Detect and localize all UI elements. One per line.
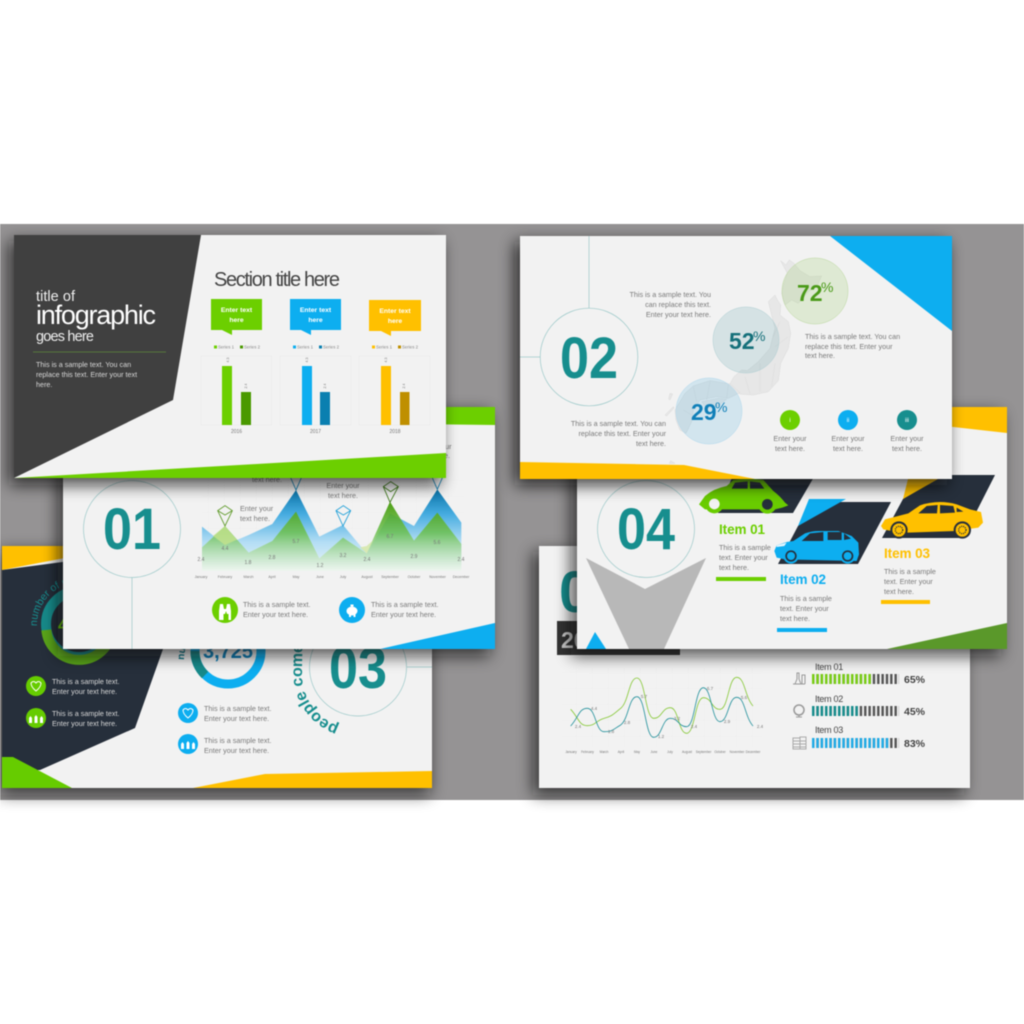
chart data labels: 2.8: [269, 555, 276, 561]
panel: slide 04 cars: [577, 407, 1007, 649]
yellow bottom band: [193, 771, 432, 788]
dark panel text 2: Enter your text here.: [52, 719, 117, 728]
section circle 04: 04: [617, 497, 675, 562]
progress row: Item 02 45%: Item 02: [815, 694, 843, 704]
slide 01 shadow: [58, 412, 490, 656]
text: piggy bank item: This is a sample text.: [371, 600, 439, 609]
line chart data labels: 2.9: [724, 719, 731, 724]
item 01 block: This is a sample: [719, 543, 771, 552]
intro text: replace this text. Enter your text: [36, 370, 137, 379]
progress row: Item 03 83%: 83%: [904, 738, 926, 750]
line chart month axis: June: [651, 750, 658, 754]
chart callout texts: Enter your: [250, 465, 284, 474]
line chart data labels: 1.8: [608, 729, 615, 734]
intro text: This is a sample text. You can: [36, 360, 131, 369]
main title: title of: [36, 289, 76, 305]
dark panel text 1: Enter your text here.: [52, 687, 117, 696]
chart data labels: 5.6: [434, 540, 441, 546]
item 02 block: text. Enter your: [780, 604, 829, 613]
line chart data labels: 2.4: [757, 724, 764, 729]
bar chart 2017: 2.4: [323, 384, 327, 388]
line chart month axis: October: [714, 750, 727, 754]
yellow top band: [900, 407, 1007, 433]
grey chevron arrow: [586, 558, 706, 649]
chart data labels: 2.4: [364, 557, 371, 563]
progress row: Item 01 65%: [793, 662, 926, 686]
line chart data labels: 6.7: [707, 686, 714, 691]
bar chart 2018: Series 1: [376, 344, 393, 350]
callout: green: [211, 299, 262, 335]
text block 1: This is a sample text.: [204, 704, 272, 713]
chart data labels: 5.7: [293, 539, 300, 545]
item 03 block: Item 03: [884, 546, 930, 561]
blue icon: people: [178, 734, 198, 754]
slide 03 shadow: [0, 551, 430, 795]
dark navy side panel: [2, 561, 165, 770]
bar chart 2018: 2018: [389, 429, 401, 435]
icon item i: text here.: [775, 444, 805, 453]
chart data labels: 1.8: [245, 560, 252, 566]
bubble 52%: 52: [729, 328, 755, 354]
slide 02 shadow: [515, 242, 947, 485]
infographic: five overlapping template slides: [0, 223, 1024, 808]
yellow bottom band: [520, 462, 755, 479]
line chart month axis: May: [634, 750, 640, 754]
bar chart 2018: 2.4: [402, 384, 406, 388]
dark year box: [557, 621, 680, 655]
item 03 block: text here.: [884, 587, 914, 596]
bar chart 2017: 4.3: [305, 358, 309, 362]
item 02 block: This is a sample: [780, 594, 832, 603]
icon item ii: text here.: [833, 444, 863, 453]
line chart: [565, 676, 764, 754]
item 01 block: [716, 522, 771, 581]
line chart data labels: 1.2: [658, 734, 665, 739]
item 01 block: Item 01: [719, 522, 765, 537]
text block right: This is a sample text. You can: [805, 332, 900, 341]
chart data labels: 2.4: [198, 557, 205, 563]
line chart month axis: July: [667, 750, 673, 754]
donut chart: members: 4,210: [58, 615, 106, 636]
accent triangles: [798, 479, 938, 526]
progress row: Item 03 83%: [793, 725, 926, 750]
progress row: Item 03 83%: Item 03: [815, 725, 843, 735]
bar chart 2017: [280, 344, 351, 435]
text block top: can replace this text.: [645, 300, 711, 309]
green icon: hearts: [26, 676, 46, 696]
line chart month axis: August: [682, 750, 692, 754]
bar chart 2017: Series 1: [297, 344, 314, 350]
line chart data labels: 4.4: [591, 706, 598, 711]
panel: slide 03 people count: [1, 545, 433, 789]
line chart data labels: 5.7: [641, 694, 648, 699]
icon item ii: Enter your: [831, 434, 865, 443]
chart callout texts: Enter your: [240, 504, 274, 513]
progress row: Item 01 65%: Item 01: [815, 662, 843, 672]
bar chart 2017: Series 2: [323, 344, 340, 350]
section circle 01: [84, 480, 180, 649]
chart data labels: 2.4: [458, 557, 465, 563]
green corner triangle: [2, 757, 72, 788]
bubble 52%: [713, 307, 779, 373]
callout: yellow: [369, 300, 421, 336]
line chart month axis: September: [696, 750, 712, 754]
main title: [36, 289, 156, 345]
bubble 72%: %: [821, 279, 833, 295]
section circle 02: 02: [560, 326, 618, 391]
bubble 29%: [676, 378, 742, 444]
section circle 02: [520, 236, 638, 406]
progress row: Item 02 45%: [794, 694, 926, 718]
line chart data labels: 2.4: [691, 724, 698, 729]
green bottom band: [14, 453, 446, 478]
car panels: [718, 470, 995, 564]
line chart month axis: April: [618, 750, 624, 754]
callout: green: Enter text: [221, 307, 253, 314]
line chart data labels: 2.4: [575, 724, 582, 729]
text block top: Enter your text here.: [646, 310, 711, 319]
bubble 29%: %: [715, 399, 727, 415]
item 03 block: [881, 546, 936, 604]
blue top-right triangle: [830, 236, 952, 331]
blue bottom-right wedge: [380, 623, 495, 649]
chart month axis: October: [408, 575, 421, 579]
bar chart 2016: Series 1: [218, 344, 235, 350]
text block 2: Enter your text here.: [204, 746, 269, 755]
line chart month axis: November: [730, 750, 745, 754]
donut chart: 3,725: 3,725: [203, 641, 253, 663]
icon item iii: text here.: [892, 444, 922, 453]
panel: slide 02 Japan map: [520, 236, 952, 479]
text block 2: This is a sample text.: [204, 736, 272, 745]
chart data labels: 3.2: [340, 553, 347, 559]
dark panel text 1: This is a sample text.: [52, 677, 120, 686]
text block top: This is a sample text. You: [629, 290, 711, 299]
text block left: This is a sample text. You can: [571, 419, 666, 428]
donut chart: 3,725: [190, 648, 266, 690]
icon item iii: Enter your: [890, 434, 924, 443]
chart month axis: December: [453, 575, 470, 579]
chart callout texts: text here.: [420, 451, 450, 460]
chart data labels: 1.2: [317, 563, 324, 569]
area chart: [201, 489, 462, 570]
callout: yellow: here: [388, 318, 402, 325]
line chart month axis: February: [581, 750, 594, 754]
icon: handshake: [212, 597, 238, 623]
chart month axis: May: [293, 575, 300, 579]
callout: yellow: Enter text: [379, 308, 411, 315]
chart month axis: June: [316, 575, 324, 579]
bar chart 2016: 2.4: [244, 384, 248, 388]
dark grey title shape: [14, 235, 201, 478]
bubble 52%: %: [753, 328, 765, 344]
item 02 block: Item 02: [780, 572, 826, 587]
item 01 block: text here.: [719, 563, 749, 572]
chart month axis: [195, 575, 470, 579]
section title: Section title here: [214, 269, 340, 291]
intro text: here.: [36, 380, 52, 389]
chart markers: [218, 474, 444, 526]
icon item iii: iii: [905, 418, 909, 424]
chart callout texts: text here.: [252, 475, 282, 484]
line chart data labels: 2.8: [624, 720, 631, 725]
chart data labels: 4.4: [222, 546, 229, 552]
section circle 03: [308, 648, 432, 717]
line chart month axis: December: [746, 750, 761, 754]
bubble 72%: [782, 258, 848, 324]
bar chart 2018: 4.3: [384, 358, 388, 362]
icon: piggy bank: [339, 597, 365, 623]
text block left: text here.: [636, 439, 666, 448]
callout: blue: here: [308, 317, 323, 324]
text block left: replace this text. Enter your: [578, 429, 667, 438]
chart month axis: July: [340, 575, 346, 579]
chart data labels: 6.7: [387, 534, 394, 540]
dark panel text 2: This is a sample text.: [52, 709, 120, 718]
bar chart 2016: [201, 344, 272, 435]
chart month axis: April: [268, 575, 276, 579]
bubble 72%: 72: [797, 280, 823, 306]
item 01 block: text. Enter your: [719, 553, 768, 562]
chart callout texts: [240, 442, 452, 523]
chart month axis: November: [429, 575, 447, 579]
text: piggy bank item: Enter your text here.: [371, 610, 436, 619]
callout: blue: Enter text: [300, 307, 332, 314]
curved label: number: number of: [178, 648, 186, 660]
chart month axis: February: [218, 575, 232, 579]
line chart month axis: January: [565, 750, 577, 754]
bar chart 2018: Series 2: [402, 344, 419, 350]
chart callout texts: text here.: [240, 514, 270, 523]
chart month axis: August: [361, 575, 373, 579]
curved label: number of members: number of members: [30, 580, 64, 626]
donut chart: members: [46, 591, 112, 660]
chart month axis: March: [244, 575, 254, 579]
bar chart 2016: Series 2: [244, 344, 261, 350]
section circle 01: 01: [103, 497, 161, 562]
main title: infographic: [36, 300, 156, 330]
line chart data labels: 5.6: [741, 695, 748, 700]
slide title shadow: [9, 241, 441, 485]
panel: slide 01 area chart: [63, 407, 495, 649]
callout: green: here: [229, 317, 244, 324]
panel: slide 05 line chart and progress: [539, 546, 970, 788]
text: handshake item: This is a sample text.: [243, 600, 311, 609]
car: yellow sedan: [881, 502, 983, 539]
map of Japan: [665, 260, 822, 463]
line chart month axis: [565, 750, 761, 754]
yellow top band: [2, 546, 70, 570]
icon item i: Enter your: [773, 434, 807, 443]
text block right: replace this text. Enter your: [805, 342, 893, 351]
chart data labels: 2.9: [411, 554, 418, 560]
item 02 block: text here.: [780, 614, 810, 623]
grey backdrop band: [0, 224, 1024, 800]
section circle 04: [598, 480, 694, 578]
chart callout texts: text here.: [328, 491, 358, 500]
chart callout texts: Enter your: [326, 481, 360, 490]
section number 05: 05: [559, 560, 624, 625]
icon item i: [773, 410, 807, 453]
car: blue hatchback: [774, 531, 859, 564]
text block right: text here.: [805, 351, 835, 360]
callout: blue: [290, 299, 341, 335]
text block 1: Enter your text here.: [204, 714, 269, 723]
bar chart 2017: 2017: [310, 429, 321, 435]
green icon: people: [26, 708, 46, 728]
slide 05 shadow: [533, 552, 964, 795]
section circle 03: 03: [329, 636, 387, 701]
bar chart 2016: 4.3: [226, 358, 230, 362]
car: green beetle: [699, 479, 788, 514]
chart month axis: January: [195, 575, 208, 579]
icon item ii: [831, 410, 865, 453]
bar chart 2018: [359, 344, 430, 435]
slide 04 shadow: [571, 413, 1001, 656]
text: handshake item: Enter your text here.: [243, 610, 308, 619]
chart callout texts: Enter your: [418, 442, 452, 451]
blue icon: hearts: [178, 703, 198, 723]
chart month axis: September: [381, 575, 400, 579]
bar chart 2016: 2016: [231, 429, 242, 435]
panel: title slide with bar charts: [14, 235, 446, 478]
icon item ii: ii: [847, 418, 849, 424]
item 03 block: This is a sample: [884, 567, 936, 576]
main title: goes here: [36, 329, 94, 345]
progress row: Item 01 65%: 65%: [904, 674, 926, 686]
blue corner triangle: [586, 632, 606, 649]
item 02 block: [777, 572, 832, 632]
icon item i: i: [789, 418, 791, 424]
line chart data labels: [575, 686, 764, 739]
bubble 29%: 29: [691, 399, 717, 425]
curved label: people come: people come: [292, 648, 340, 734]
progress row: Item 02 45%: 45%: [904, 706, 926, 718]
line chart month axis: March: [600, 750, 609, 754]
line chart data labels: 3.2: [674, 716, 681, 721]
green top band: [445, 406, 496, 426]
dark year box: 2018: [561, 627, 612, 653]
item 03 block: text. Enter your: [884, 577, 933, 586]
chart data labels: [198, 534, 465, 569]
icon item iii: [890, 410, 924, 453]
green bottom-right wedge: [887, 623, 1007, 649]
